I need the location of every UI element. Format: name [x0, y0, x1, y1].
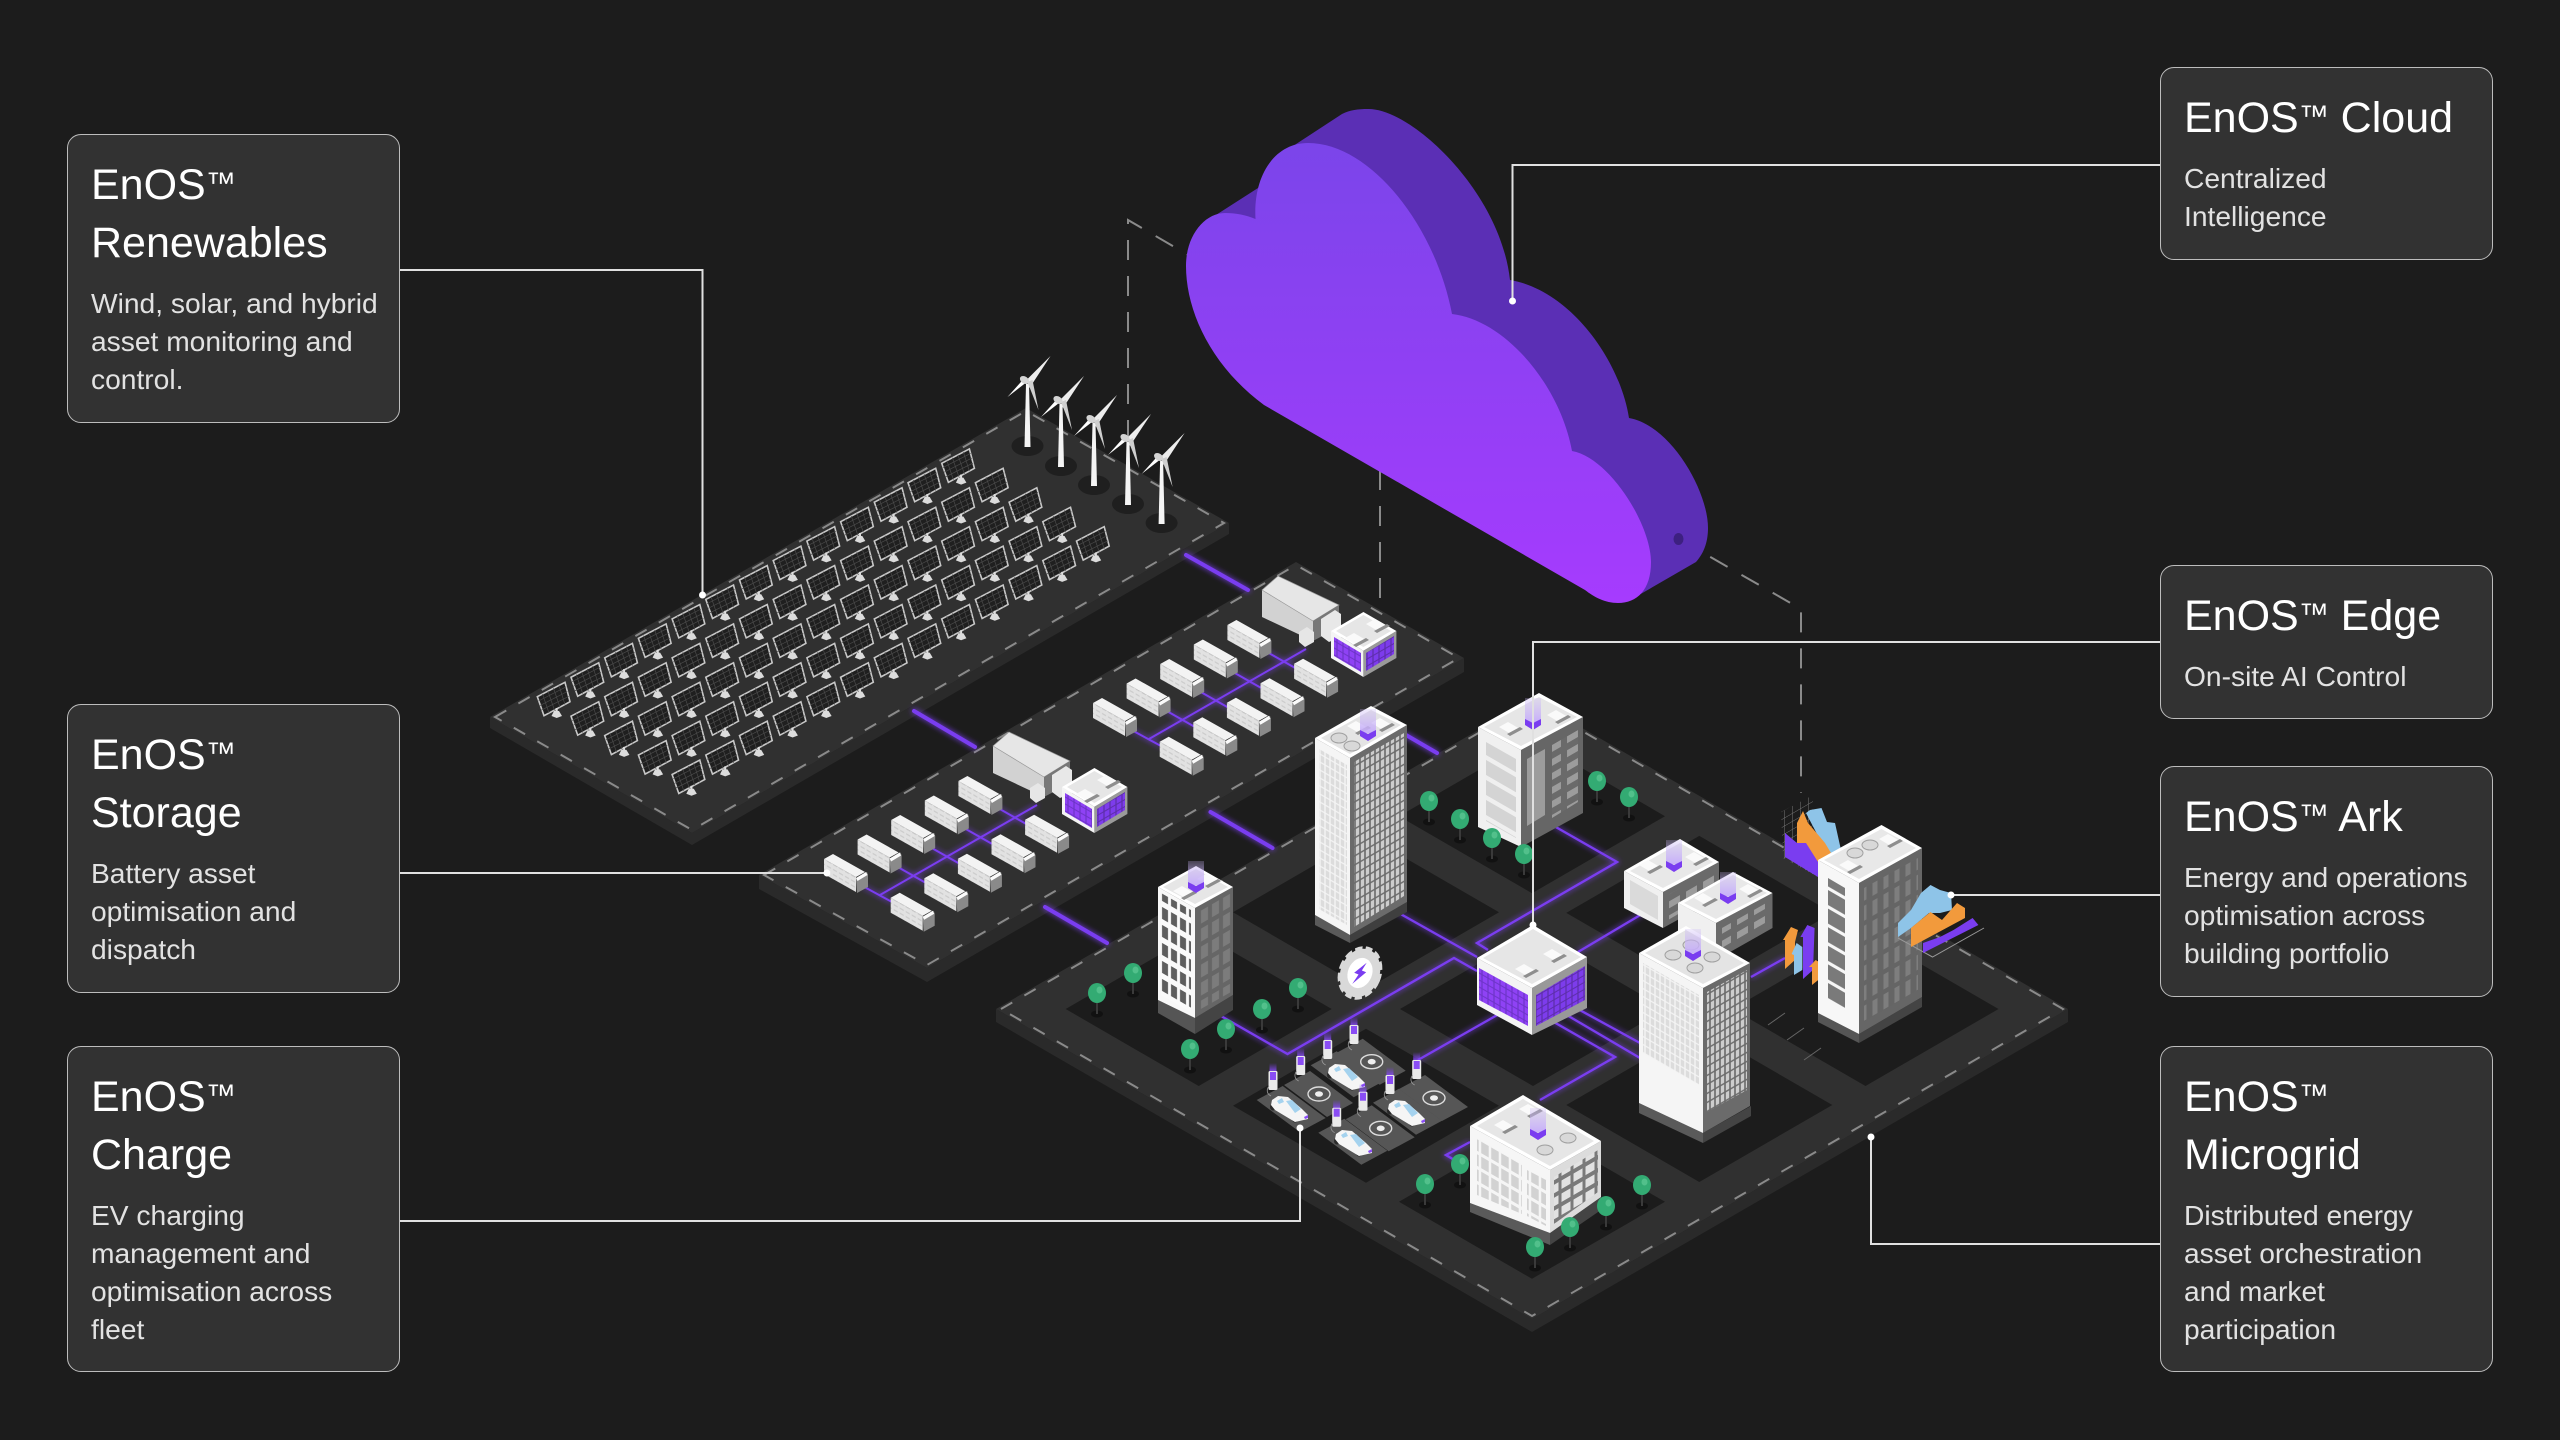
wind turbines — [1008, 356, 1185, 533]
platform: storage — [759, 562, 1464, 982]
trees around charging and lower block — [1181, 978, 1651, 1272]
platform: microgrid — [996, 699, 2068, 1332]
text block: asset orchestration — [2184, 1237, 2422, 1269]
chart: back wall area graph — [1781, 795, 1841, 877]
heading — [91, 1073, 236, 1179]
trees behind buildings — [1088, 771, 1638, 1018]
panel: EnOS Cloud — [2160, 67, 2493, 260]
text block — [2184, 162, 2327, 232]
microgrid wiring — [1221, 826, 1785, 1161]
text block: Energy and operations — [2184, 861, 2468, 893]
text block: Wind, solar, and hybrid — [91, 287, 378, 319]
text block: On-site AI Control — [2184, 660, 2406, 692]
platform: renewables — [490, 408, 1229, 845]
heading: EnOS™ Cloud — [2184, 94, 2453, 142]
text block: optimisation and — [91, 895, 296, 927]
battery group two — [1093, 576, 1396, 776]
dashed links from cloud — [1128, 220, 1801, 793]
text block — [2184, 861, 2468, 969]
panel: EnOS Edge — [2160, 565, 2493, 719]
text block: participation — [2184, 1313, 2336, 1345]
text block: optimisation across — [2184, 899, 2425, 931]
battery group one — [824, 732, 1127, 932]
heading: EnOS™ — [91, 161, 236, 209]
text block: building portfolio — [2184, 937, 2389, 969]
panel: EnOS Renewables — [67, 134, 400, 423]
text block: control. — [91, 363, 183, 395]
small building B — [1678, 872, 1772, 960]
building: lower block — [1470, 1095, 1601, 1245]
chart: side area graph — [1898, 885, 1984, 957]
trees beside upper block — [1420, 791, 1533, 878]
text block: EV charging — [91, 1199, 245, 1231]
heading: EnOS™ — [91, 731, 236, 779]
panel: EnOS Ark — [2160, 766, 2493, 997]
heading: EnOS™ Edge — [2184, 592, 2441, 640]
building: central purple hub — [1477, 925, 1587, 1035]
text block: Battery asset — [91, 857, 256, 889]
energy connectors between platforms — [914, 555, 1437, 943]
text block: and market — [2184, 1275, 2325, 1307]
panel: EnOS Microgrid — [2160, 1046, 2493, 1372]
heading: Microgrid — [2184, 1131, 2361, 1179]
icon: gear with bolt — [1331, 941, 1389, 1005]
panel: EnOS Charge — [67, 1046, 400, 1372]
cloud — [1186, 109, 1708, 603]
small building A — [1624, 839, 1719, 928]
text block: Centralized — [2184, 162, 2327, 194]
heading: EnOS™ Ark — [2184, 793, 2403, 841]
heading: EnOS™ — [2184, 1073, 2329, 1121]
text block — [2184, 1199, 2422, 1345]
heading: Charge — [91, 1131, 232, 1179]
text block: dispatch — [91, 933, 196, 965]
text block: Distributed energy — [2184, 1199, 2413, 1231]
connector end dots — [699, 298, 1954, 1140]
text block: management and — [91, 1237, 310, 1269]
text block: asset monitoring and — [91, 325, 353, 357]
text block — [91, 287, 378, 395]
text block: fleet — [91, 1313, 144, 1345]
panel: EnOS Storage — [67, 704, 400, 993]
arrows chart — [1768, 925, 1833, 1060]
heading — [91, 161, 328, 267]
heading: EnOS™ — [91, 1073, 236, 1121]
solar array — [537, 449, 1109, 796]
text block — [91, 857, 296, 965]
heading — [2184, 1073, 2361, 1179]
heading — [91, 731, 242, 837]
building: lower long tower — [1639, 926, 1751, 1143]
EV charging bays — [1257, 1017, 1468, 1165]
building: left block — [1158, 861, 1233, 1034]
text block: Intelligence — [2184, 200, 2327, 232]
heading: Storage — [91, 789, 242, 837]
text block: optimisation across — [91, 1275, 332, 1307]
text block — [91, 1199, 332, 1345]
building: right tower — [1818, 825, 1922, 1043]
building: upper block — [1478, 693, 1583, 847]
heading: Renewables — [91, 219, 328, 267]
connector lines — [400, 165, 2160, 1244]
building: tall tower — [1315, 706, 1407, 943]
